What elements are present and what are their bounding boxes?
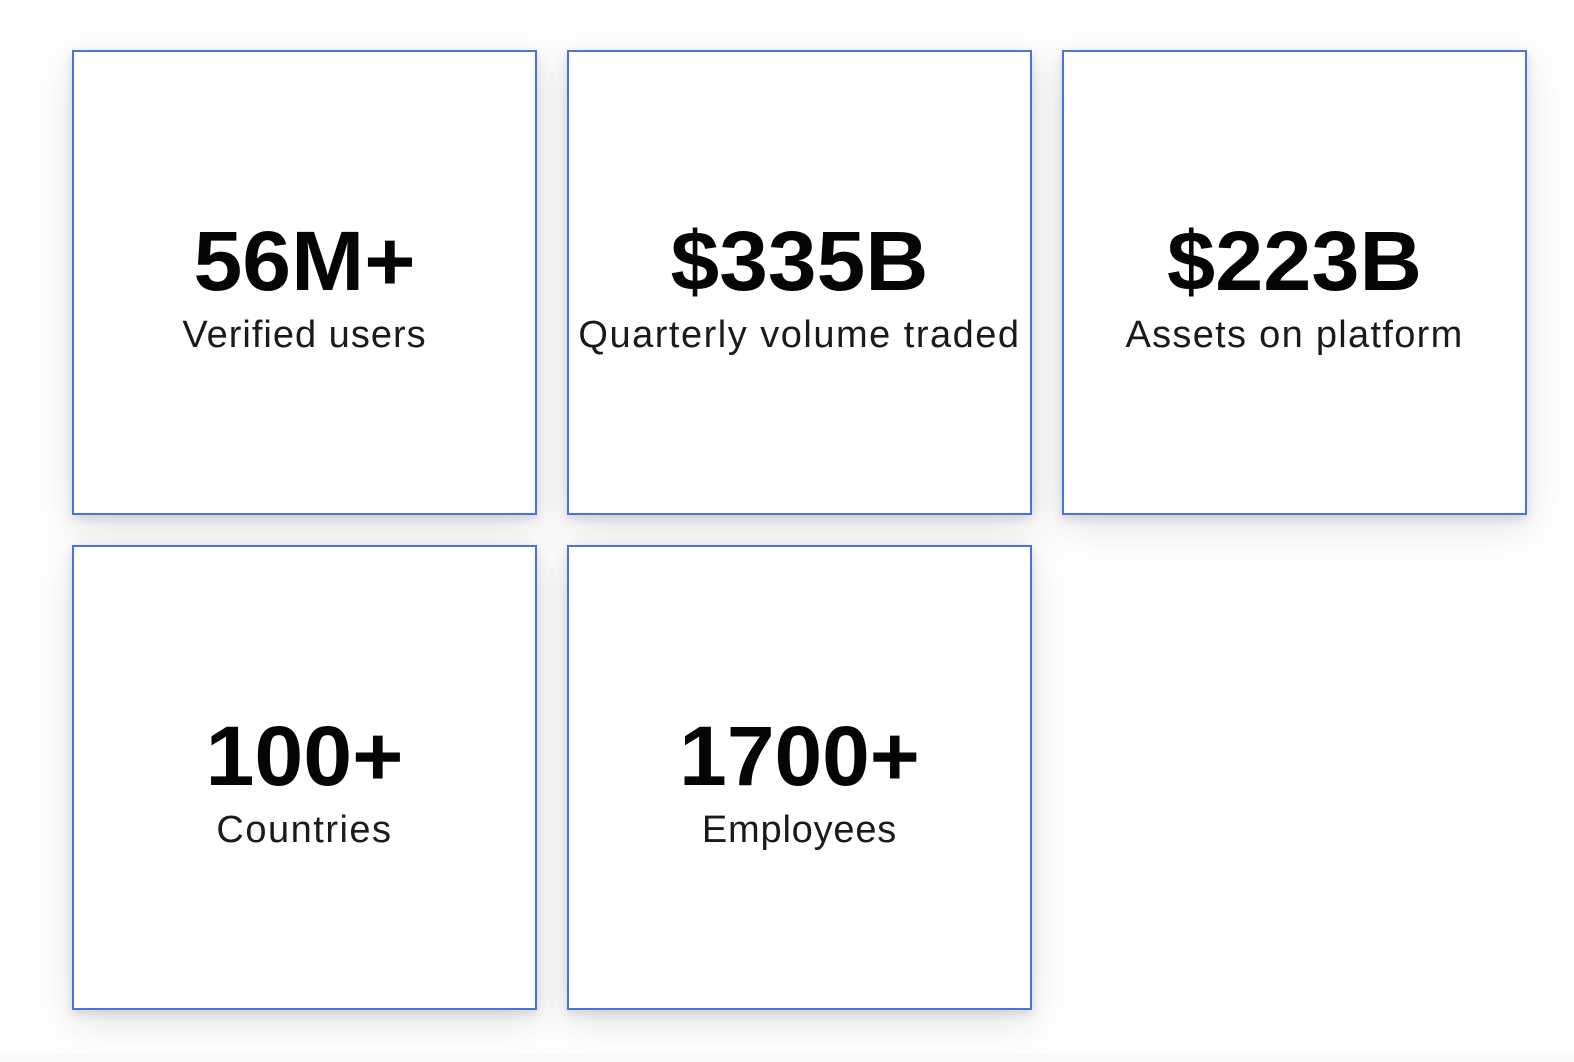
card: employees [567,545,1032,1010]
card: assets on platform [1062,50,1527,515]
stat: 100+: 100+ [205,709,404,803]
stat: 56M+: 56M+ [193,214,416,308]
stat: $223B: $223B [1167,214,1422,308]
label: quarterly volume traded: Quarterly volume traded [578,314,1021,356]
stat: $335B: $335B [671,214,928,308]
card: countries [72,545,537,1010]
label: assets on platform: Assets on platform [1125,314,1464,356]
stat: 1700+: 1700+ [679,709,920,803]
footer band [0,1053,1574,1062]
label: countries: Countries [216,809,393,851]
card: quarterly volume [567,50,1032,515]
card: verified users [72,50,537,515]
label: employees: Employees [702,809,897,851]
label: verified users: Verified users [182,314,427,356]
